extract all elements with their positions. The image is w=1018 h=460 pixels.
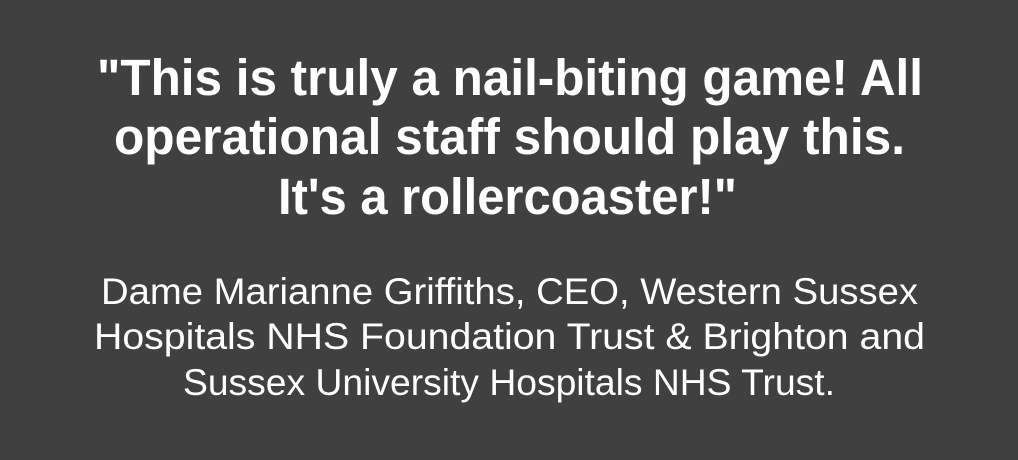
- attribution text: Dame Marianne Griffiths, CEO, Western Sussex: [101, 271, 919, 312]
- quote heading: operational staff should play this.: [114, 108, 905, 165]
- attribution text: Hospitals NHS Foundation Trust & Brighton and: [94, 316, 925, 357]
- attribution text: Sussex University Hospitals NHS Trust.: [183, 362, 835, 403]
- attribution text: [94, 271, 925, 403]
- quote heading: [97, 49, 923, 225]
- quote heading: "This is truly a nail-biting game! All: [97, 49, 923, 106]
- quote heading: It's a rollercoaster!": [278, 168, 737, 225]
